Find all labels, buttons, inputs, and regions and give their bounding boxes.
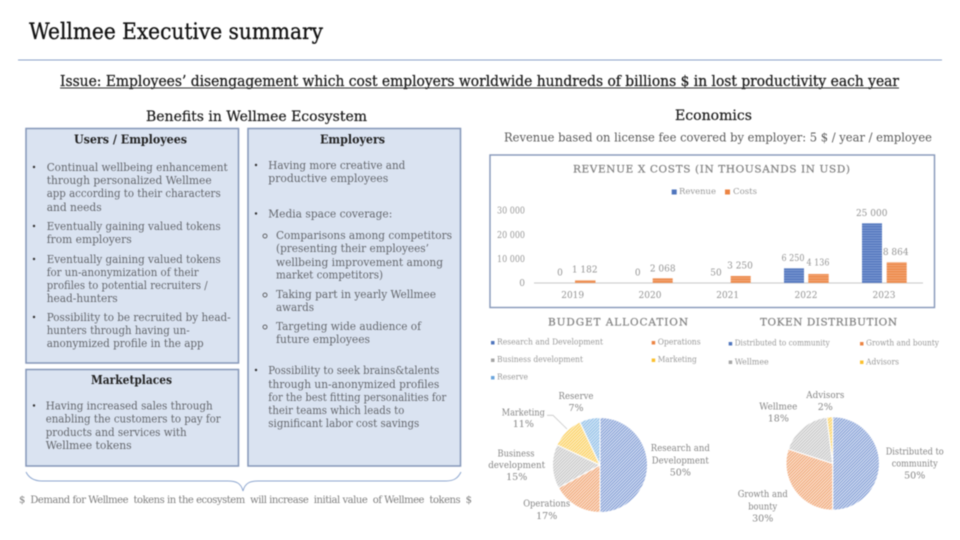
bars xyxy=(575,223,907,283)
category labels xyxy=(561,291,896,301)
pie chart: budget allocation xyxy=(488,317,710,522)
list: user benefits: head-hunters xyxy=(47,292,118,305)
revenue basis note: Revenue based on license fee covered by employer: 5 $ / year / employee xyxy=(504,130,932,144)
chart title: BUDGET ALLOCATION xyxy=(548,317,688,329)
list: user benefits: through personalized Wellmee xyxy=(47,174,212,187)
list: employer benefits: for the best fitting personalities for xyxy=(268,391,447,404)
list: employer benefits: future employees xyxy=(276,333,370,346)
list: employer benefits: wellbeing improvement among xyxy=(276,256,443,269)
legend: Advisors xyxy=(865,357,899,367)
title: Wellmee Executive summary xyxy=(29,20,324,45)
list: employer benefits: Comparisons among competitors xyxy=(276,229,452,242)
list: user benefits: Eventually gaining valued tokens xyxy=(47,253,221,266)
data labels: 50 xyxy=(710,269,722,279)
pie slices xyxy=(553,418,648,513)
pie labels: Business xyxy=(498,449,535,460)
pie labels: Advisors xyxy=(805,390,844,401)
list: employer benefits: (presenting their employees’ xyxy=(276,242,429,255)
list: user benefits: hunters through having un- xyxy=(47,324,190,337)
pie chart: token distribution xyxy=(729,317,944,524)
pie labels xyxy=(738,390,944,524)
pie labels: 50% xyxy=(904,470,925,481)
legend xyxy=(729,339,939,367)
y axis labels: 0 xyxy=(519,279,525,289)
pie labels: Wellmee xyxy=(759,401,798,412)
list: user benefits: Continual wellbeing enhancement xyxy=(47,161,228,174)
pie labels xyxy=(488,391,710,522)
list: employer benefits: through un-anonymized profiles xyxy=(268,378,440,391)
data labels xyxy=(557,209,909,279)
pie labels: bounty xyxy=(748,501,778,512)
list: employer benefits: Having more creative and xyxy=(268,159,405,172)
category labels: 2022 xyxy=(795,291,817,301)
list: user benefits: and needs xyxy=(47,201,102,214)
legend: Distributed to community xyxy=(735,339,830,349)
legend xyxy=(672,187,757,197)
pie labels: community xyxy=(892,459,938,470)
list: marketplace benefits: Wellmee tokens xyxy=(46,439,132,452)
bar chart: revenue x costs xyxy=(490,155,934,308)
data labels: 4 136 xyxy=(806,259,830,269)
category labels: 2019 xyxy=(561,291,584,301)
pie labels: Reserve xyxy=(558,391,594,402)
data labels: 25 000 xyxy=(856,209,888,219)
legend xyxy=(491,338,701,382)
pie labels: 17% xyxy=(536,511,557,522)
list: marketplace benefits: Having increased sales through xyxy=(46,399,213,412)
list: employer benefits: awards xyxy=(276,301,314,314)
issue statement: Issue: Employees’ disengagement which cost employers worldwide hundreds of billions $ in lost productivity each year xyxy=(60,74,899,90)
list: user benefits: Eventually gaining valued tokens xyxy=(47,220,221,233)
y axis labels: 10 000 xyxy=(497,255,525,265)
legend: Revenue xyxy=(679,187,716,197)
list: marketplace benefits: enabling the customers to pay for xyxy=(46,412,221,425)
list: marketplace benefits: products and services with xyxy=(46,426,187,439)
list: employer benefits: Taking part in yearly Wellmee xyxy=(276,288,436,301)
list: employer benefits: market competitors) xyxy=(276,268,383,282)
chart title: TOKEN DISTRIBUTION xyxy=(760,317,897,329)
panel: marketplaces xyxy=(26,370,238,466)
legend: Business development xyxy=(497,355,584,365)
pie slices xyxy=(786,417,879,510)
list: employer benefits xyxy=(255,159,452,430)
list: employer benefits: Media space coverage: xyxy=(268,208,392,220)
legend: Reserve xyxy=(497,372,528,382)
heading: economics: Economics xyxy=(675,108,752,124)
y axis labels: 30 000 xyxy=(497,207,525,217)
list: employer benefits: Possibility to seek brains&talents xyxy=(268,364,440,377)
legend: Wellmee xyxy=(735,357,769,367)
list: user benefits: anonymized profile in the app xyxy=(47,337,204,350)
list: employer benefits: productive employees xyxy=(268,172,389,185)
list: employer benefits: significant labor cost savings xyxy=(268,417,420,430)
pie labels: 2% xyxy=(818,402,833,413)
y axis labels: 20 000 xyxy=(497,231,525,241)
list: employer benefits: Targeting wide audience of xyxy=(276,320,422,333)
legend: Research and Development xyxy=(497,338,604,348)
data labels: 6 250 xyxy=(782,254,805,264)
chart title: REVENUE X COSTS (IN THOUSANDS IN USD) xyxy=(573,164,850,176)
list: user benefits: Possibility to be recruited by head- xyxy=(47,311,231,324)
pie labels: Distributed to xyxy=(886,446,944,457)
pie labels: development xyxy=(488,460,545,471)
category labels: 2023 xyxy=(873,291,896,301)
pie labels: 11% xyxy=(513,419,534,430)
legend: Growth and bounty xyxy=(866,339,939,349)
list: user benefits: for un-anonymization of their xyxy=(47,266,199,279)
pie labels: Development xyxy=(652,456,709,467)
pie labels: 18% xyxy=(768,413,789,424)
heading: marketplaces: Marketplaces xyxy=(91,373,172,387)
legend: Operations xyxy=(658,338,701,348)
panel: employers xyxy=(248,128,460,466)
list: user benefits: from employers xyxy=(47,233,132,246)
data labels: 0 xyxy=(557,269,563,279)
pie labels: 50% xyxy=(670,468,691,479)
list: marketplace benefits xyxy=(33,399,221,452)
pie labels: Marketing xyxy=(502,407,545,418)
y axis labels xyxy=(497,207,525,289)
data labels: 3 250 xyxy=(727,261,753,271)
pie labels: Operations xyxy=(523,499,570,510)
data labels: 2 068 xyxy=(650,265,676,275)
legend: Costs xyxy=(733,187,757,197)
heading: benefits: Benefits in Wellmee Ecosystem xyxy=(146,109,367,125)
pie labels: Research and xyxy=(651,443,710,454)
data labels: 0 xyxy=(635,269,641,279)
heading: users / employees: Users / Employees xyxy=(74,132,187,146)
list: user benefits: app according to their characters xyxy=(47,187,221,200)
demand statement: $ Demand for Wellmee tokens in the ecosystem will increase initial value of Wellmee tokens $ xyxy=(19,495,472,506)
list: employer benefits: their teams which leads to xyxy=(268,404,405,417)
pie labels: 30% xyxy=(752,513,773,524)
panel: users / employees xyxy=(26,128,238,363)
category labels: 2020 xyxy=(639,291,662,301)
data labels: 1 182 xyxy=(572,266,598,276)
pie labels: 15% xyxy=(506,472,527,483)
data labels: 8 864 xyxy=(883,248,909,258)
brace xyxy=(26,472,461,491)
legend: Marketing xyxy=(658,355,697,365)
list: user benefits xyxy=(33,161,231,350)
list: user benefits: profiles to potential recruiters / xyxy=(47,279,208,292)
heading: employers: Employers xyxy=(320,132,385,146)
pie labels: Growth and xyxy=(738,489,788,500)
category labels: 2021 xyxy=(716,291,739,301)
pie labels: 7% xyxy=(568,403,584,414)
